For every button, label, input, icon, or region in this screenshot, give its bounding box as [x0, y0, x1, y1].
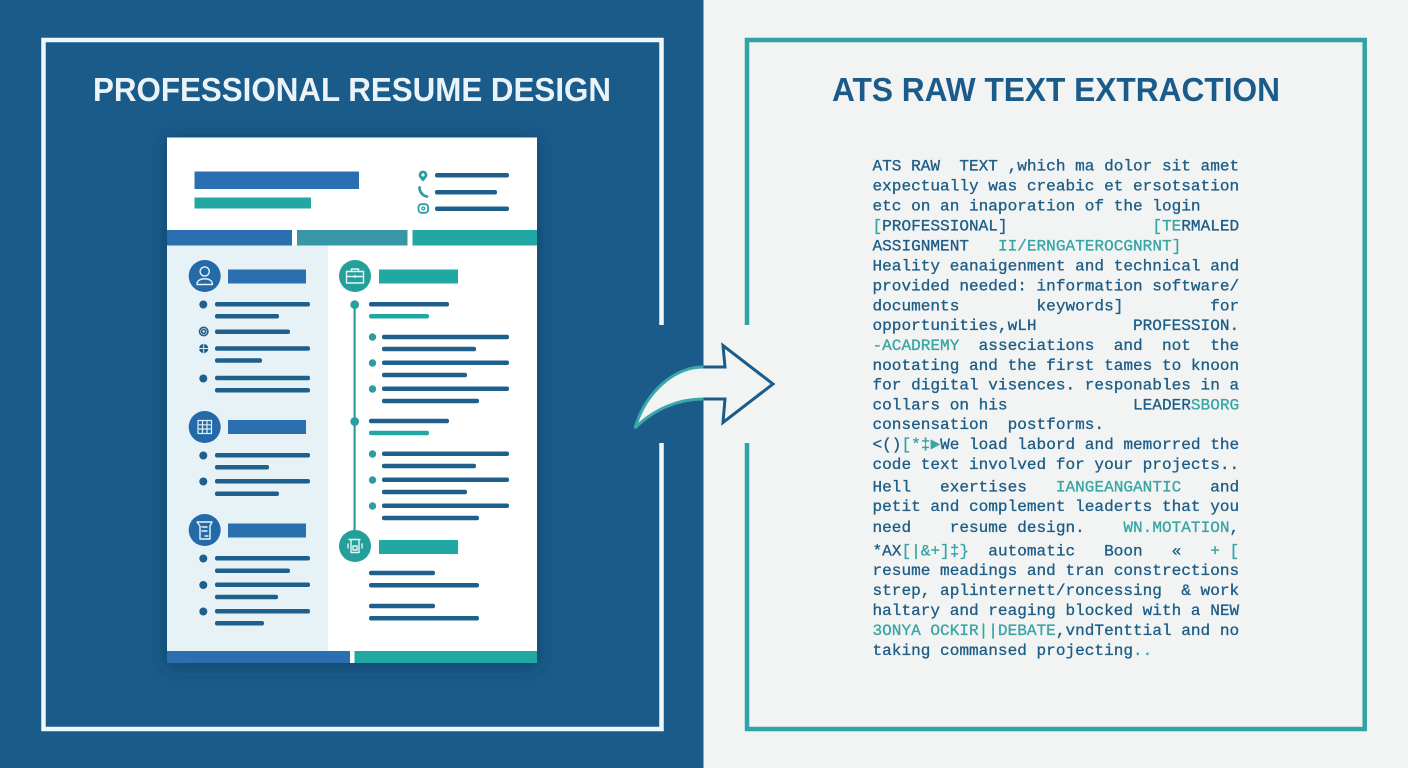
panel: professional resume design background — [0, 0, 704, 768]
extracted raw text block: code text involved for your projects.. — [872, 456, 1239, 474]
extracted raw text block — [872, 158, 1239, 660]
main section: education — [339, 530, 479, 620]
icon: document — [189, 514, 221, 546]
timeline line — [354, 305, 356, 535]
right panel frame — [747, 40, 1365, 729]
icon: phone — [420, 188, 427, 196]
sidebar section: skills — [189, 411, 310, 496]
section title bar — [228, 270, 306, 284]
extracted raw text block: expectually was creabic et ersotsation — [872, 178, 1239, 196]
extracted raw text block: strep, aplinternett/roncessing & work — [872, 582, 1239, 600]
extracted raw text block: 3ONYA OCKIR||DEBATE,vndTenttial and no — [872, 622, 1239, 640]
extracted raw text block: [PROFESSIONAL] [TERMALED — [872, 218, 1239, 236]
extracted raw text block: taking commansed projecting.. — [872, 642, 1152, 660]
extracted raw text block: etc on an inaporation of the login — [872, 198, 1201, 216]
extracted raw text block: collars on his LEADERSBORG — [872, 397, 1239, 415]
icon: person — [189, 260, 221, 292]
icon: globe — [199, 344, 208, 353]
entries — [369, 571, 479, 620]
role one — [350, 300, 509, 403]
bullet list — [199, 452, 310, 496]
resume document — [167, 138, 537, 663]
extracted raw text block: nootating and the first tames to knoon — [872, 357, 1239, 375]
bullet list — [199, 554, 310, 626]
extracted raw text block: -ACADREMY asseciations and not the — [872, 337, 1239, 355]
extracted raw text block: <()[*‡►We load labord and memorred the — [872, 436, 1239, 454]
section title bar — [228, 524, 306, 538]
icon: target — [200, 327, 208, 336]
bullet list — [199, 300, 310, 392]
extracted raw text block: *AX[|&+]‡} automatic Boon « + [ — [872, 543, 1239, 561]
section title bar — [379, 270, 458, 284]
resume paper — [167, 138, 537, 663]
extracted raw text block: ASSIGNMENT II/ERNGATEROCGNRNT] — [872, 238, 1181, 256]
contact lines — [435, 173, 509, 211]
icon: certificate — [339, 530, 371, 562]
icon: email — [418, 204, 428, 213]
bottom colour band — [167, 651, 537, 663]
extracted raw text block: petit and complement leaderts that you — [872, 498, 1239, 516]
left panel frame — [44, 40, 662, 729]
extracted raw text block: Heality eanaigenment and technical and — [872, 258, 1239, 276]
sidebar section: documents — [189, 514, 310, 626]
heading: ATS raw text extraction: ATS RAW TEXT EXTRACTION — [832, 71, 1280, 108]
extracted raw text block: Hell exertises IANGEANGANTIC and — [872, 478, 1239, 496]
extracted raw text block: ATS RAW TEXT ,which ma dolor sit amet — [872, 158, 1239, 176]
icon: briefcase — [339, 260, 371, 292]
top colour band — [167, 230, 537, 246]
extracted raw text block: consensation postforms. — [872, 416, 1104, 434]
job title bar — [194, 198, 311, 208]
panel: ATS raw text extraction background — [704, 0, 1408, 768]
extracted raw text block: resume meadings and tran constrections — [872, 562, 1239, 580]
section title bar — [379, 540, 458, 554]
name bar — [194, 172, 359, 189]
extracted raw text block: opportunities,wLH PROFESSION. — [872, 317, 1239, 335]
extracted raw text block: for digital visences. responables in a — [872, 377, 1239, 395]
sidebar background — [167, 245, 328, 651]
section title bar — [228, 420, 306, 434]
extracted raw text block: provided needed: information software/ — [872, 278, 1239, 296]
role two — [350, 417, 509, 520]
resume header — [194, 170, 509, 213]
arrow from resume to raw text — [635, 346, 773, 428]
extracted raw text block: documents keywords] for — [872, 298, 1239, 316]
extracted raw text block: haltary and reaging blocked with a NEW — [872, 602, 1239, 620]
icon: location pin — [419, 170, 427, 182]
heading: professional resume design: PROFESSIONAL RESUME DESIGN — [93, 71, 611, 108]
sidebar section: profile — [189, 260, 310, 392]
extracted raw text block: need resume design. WN.MOTATION, — [872, 519, 1239, 537]
main section: experience — [339, 260, 509, 520]
icon: grid — [189, 411, 221, 443]
